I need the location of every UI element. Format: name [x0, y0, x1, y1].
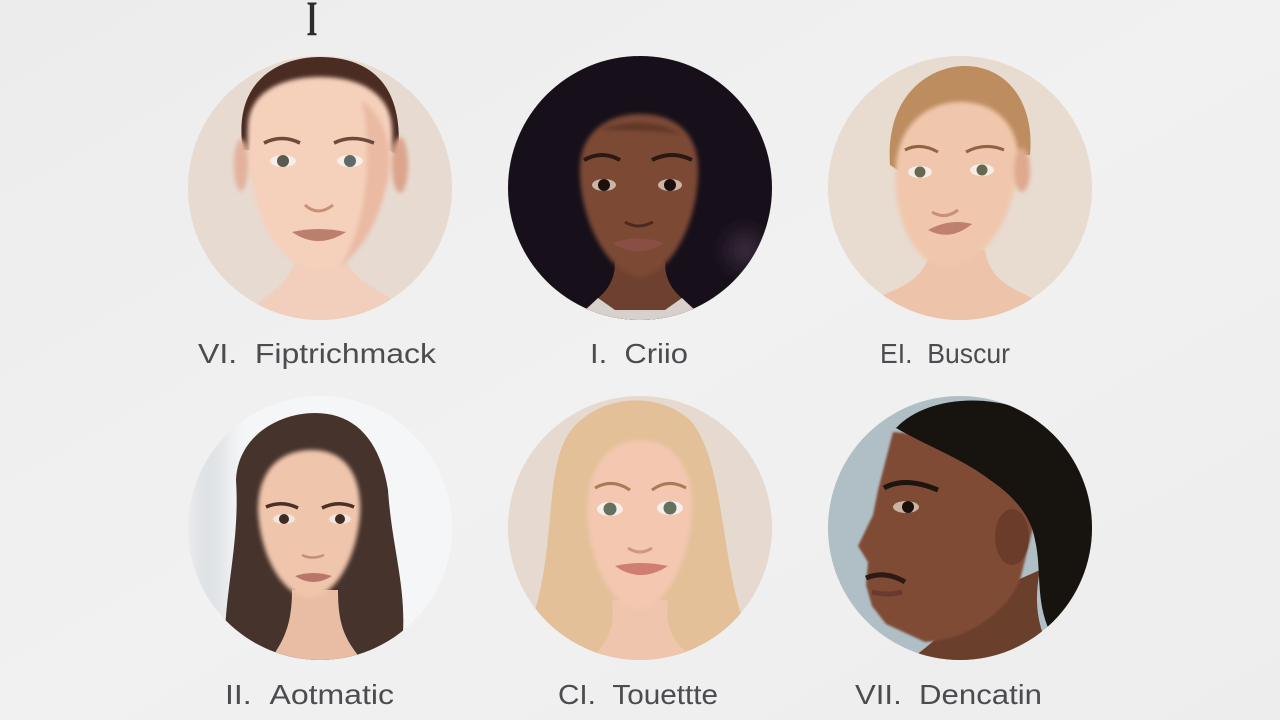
portrait: woman with hair pulled back [188, 56, 452, 330]
portrait: blonde woman with tied hair [828, 56, 1092, 330]
label: I. Criio: I. Criio [590, 338, 688, 369]
label: VII. Dencatin: VII. Dencatin [855, 679, 1042, 710]
label: CI. Touettte: CI. Touettte [558, 679, 718, 710]
portrait: man in profile [828, 396, 1095, 665]
portrait: woman with long brunette hair [190, 413, 404, 660]
portrait: woman with dark curly hair [508, 56, 772, 320]
label: II. Aotmatic: II. Aotmatic [225, 679, 394, 710]
portrait: woman with long blonde hair [508, 396, 772, 660]
label: VI. Fiptrichmack: VI. Fiptrichmack [198, 338, 437, 369]
label: EI. Buscur: EI. Buscur [880, 338, 1010, 369]
